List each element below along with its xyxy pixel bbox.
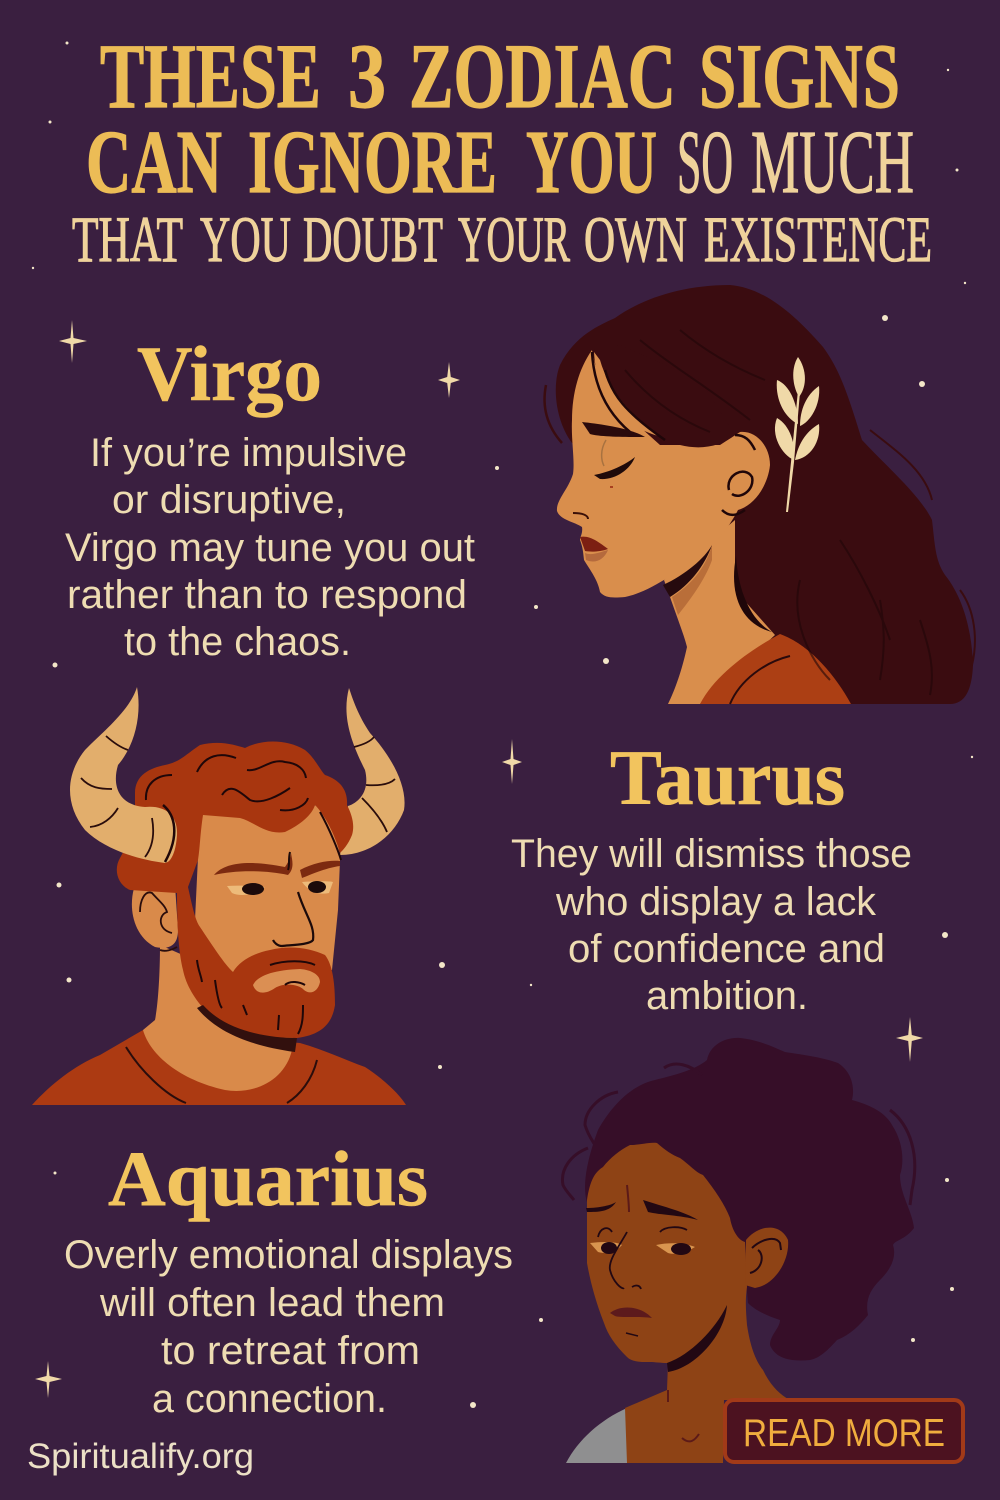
illustration: bearded man with bull horns [32, 687, 406, 1105]
title: ZODIAC [409, 25, 676, 127]
heading: Virgo: Virgo [137, 330, 322, 417]
text block: Aquarius description: a connection. [152, 1377, 387, 1421]
icon: leaf hairpin [775, 357, 819, 512]
title: 3 [348, 25, 386, 127]
sparkle star [59, 320, 87, 363]
title: YOUR [458, 204, 570, 276]
title: IGNORE [248, 113, 497, 212]
shoulder fabric [566, 1408, 627, 1463]
illustration: sad woman with curly hair [562, 1038, 915, 1463]
hair [585, 1038, 914, 1360]
title: SIGNS [699, 25, 900, 127]
text block: Virgo description: to the chaos. [124, 620, 351, 664]
heading: Taurus: Taurus [610, 734, 845, 821]
brows, eyes, nose and mouth [586, 1185, 699, 1441]
neck shadow [667, 1305, 727, 1372]
neck and shoulder skin [664, 520, 775, 704]
ear [745, 1228, 788, 1288]
right horn [340, 688, 405, 855]
text block: Aquarius description: will often lead them [99, 1281, 445, 1325]
text block: Aquarius description: to retreat from [161, 1329, 420, 1373]
title: YOU [200, 204, 291, 276]
face [195, 805, 340, 980]
panel: Aquarius text [64, 1135, 513, 1421]
ear [132, 885, 178, 948]
title: OWN [584, 204, 687, 276]
title: YOU [526, 113, 657, 212]
left horn [70, 687, 177, 863]
brows, eyes and nose [214, 852, 340, 946]
title: THAT [72, 204, 183, 276]
text block: Aquarius description [64, 1233, 513, 1421]
title [72, 25, 932, 276]
shirt [32, 1030, 406, 1105]
face skin [557, 350, 770, 597]
text block: Virgo description: or disruptive, [112, 478, 346, 522]
title: THESE [100, 25, 321, 127]
skin [587, 1143, 790, 1463]
illustration: woman in profile with leaf hairpin [545, 285, 975, 704]
eye, brow and lips [573, 422, 645, 562]
shirt [700, 634, 851, 704]
ear [722, 435, 755, 515]
button: read more: READ MORE [743, 1412, 945, 1455]
title: SO [677, 113, 733, 212]
neck [143, 945, 295, 1091]
button: read more [725, 1400, 963, 1462]
text block: Aquarius description: Overly emotional displays [64, 1233, 513, 1277]
footer brand: Spiritualify.org [27, 1437, 254, 1476]
panel: Taurus text [511, 734, 912, 1018]
text block: Taurus description [511, 832, 912, 1018]
text block: Taurus description: They will dismiss those [511, 832, 912, 876]
sparkle star [896, 1017, 923, 1062]
text block: Taurus description: ambition. [646, 974, 808, 1018]
heading: Aquarius: Aquarius [108, 1135, 428, 1222]
sparkle star [502, 739, 522, 784]
title: DOUBT [303, 204, 443, 276]
panel: Virgo text [65, 330, 475, 664]
text block: Virgo description: rather than to respond [67, 573, 467, 617]
sparkle star [438, 362, 460, 398]
text block: Virgo description: If you’re impulsive [90, 431, 407, 475]
text block: Taurus description: who display a lack [555, 880, 877, 924]
text block: Taurus description: of confidence and [568, 927, 885, 971]
hair and beard [117, 742, 353, 1038]
sparkle star [35, 1361, 62, 1398]
text block: Virgo description: Virgo may tune you out [65, 526, 475, 570]
text block: Virgo description [65, 431, 475, 664]
title: CAN [86, 113, 222, 212]
